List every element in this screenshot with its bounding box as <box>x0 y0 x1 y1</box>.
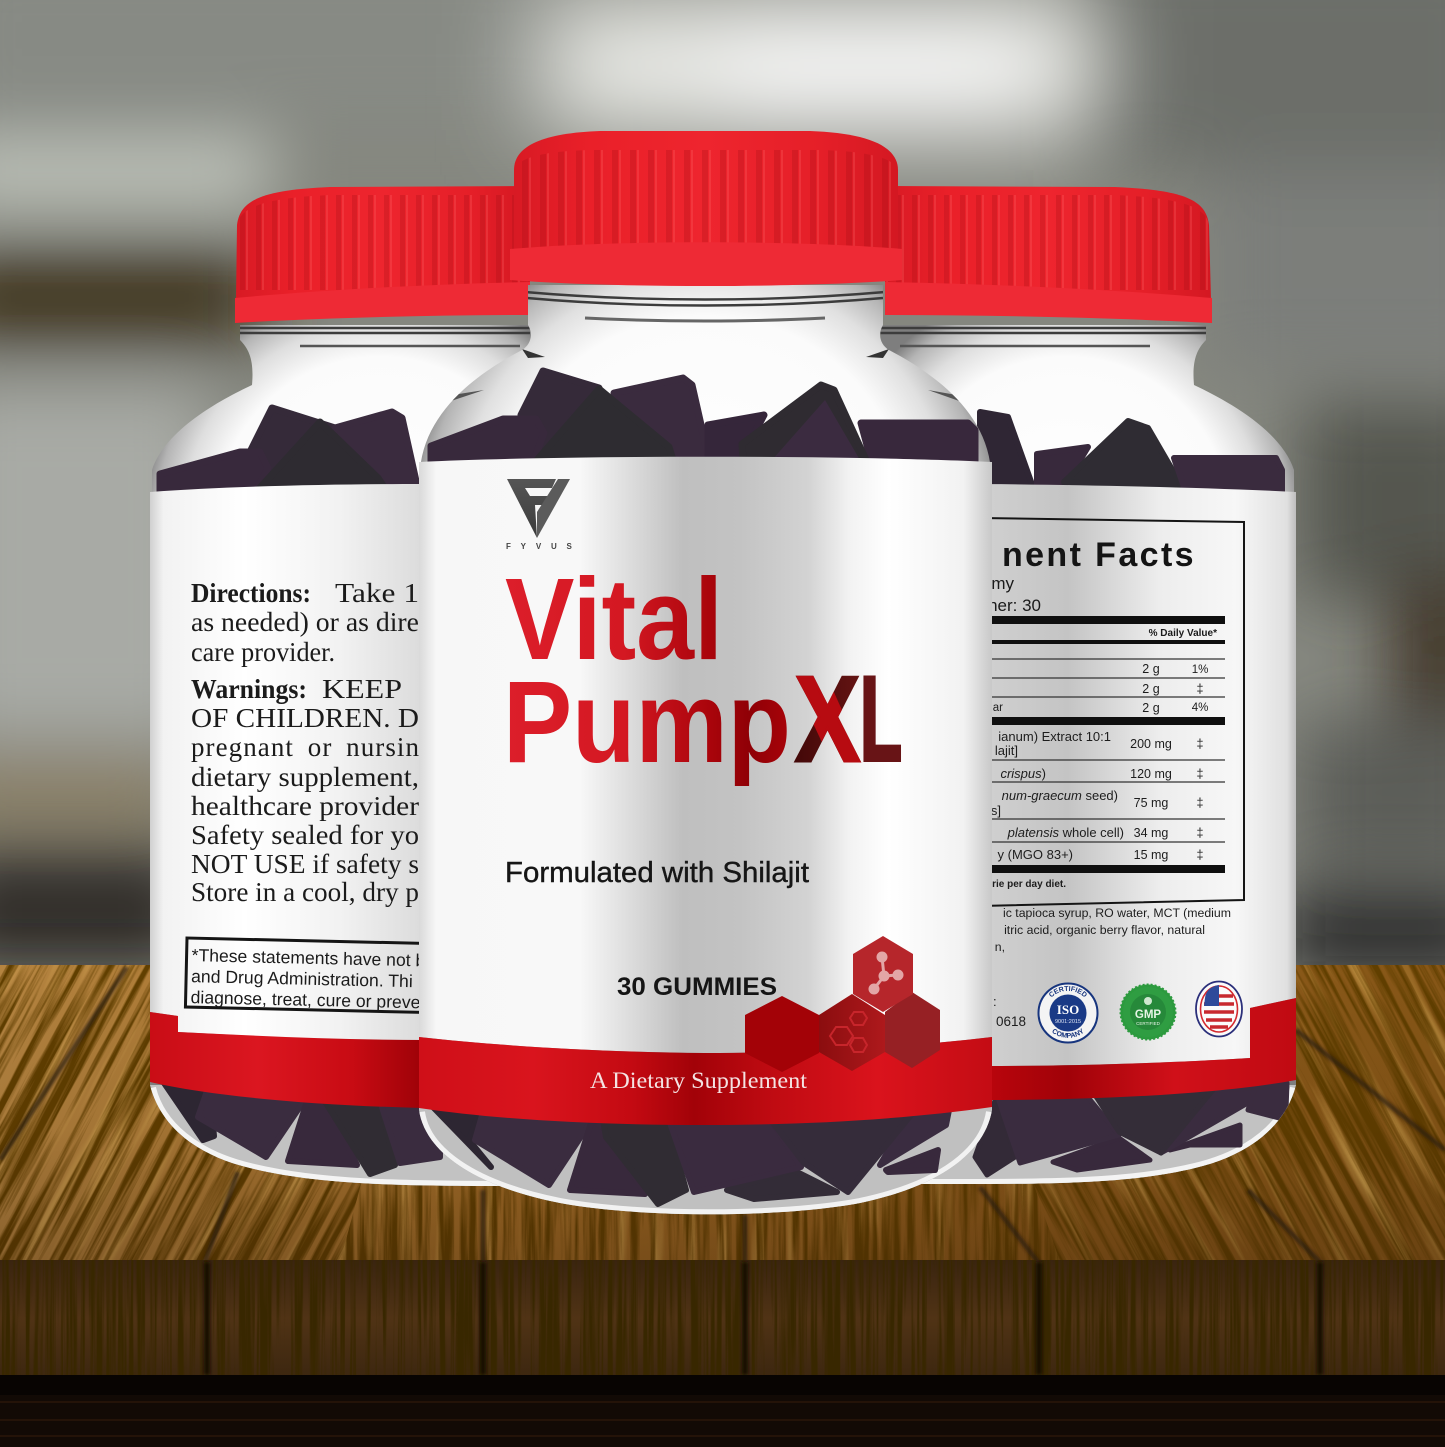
centre red band <box>419 1037 992 1125</box>
logo: FYVUS <box>506 479 582 551</box>
supplement facts panel: 4% <box>1192 702 1208 714</box>
product name: XL <box>794 676 901 762</box>
badge: GMP certified: GMP <box>1135 1009 1161 1021</box>
centre top gummies <box>431 371 975 466</box>
product name: XL: X <box>795 651 860 787</box>
directions and warnings text: healthcare provider <box>191 791 419 821</box>
supplement facts panel: rie per day diet. <box>992 879 1066 890</box>
centre label <box>419 457 992 1053</box>
supplement facts panel: 75 mg <box>1134 796 1168 810</box>
centre jar glass <box>415 280 997 1220</box>
supplement facts panel: lajit] <box>995 743 1018 758</box>
right red band <box>985 998 1296 1100</box>
supplement facts panel: my <box>991 574 1014 593</box>
phone number fragment: : <box>993 994 997 1009</box>
supplement facts panel: ‡ <box>1197 682 1204 696</box>
centre bottle <box>415 131 997 1220</box>
supplement facts panel: ‡ <box>1197 796 1204 810</box>
supplement facts panel <box>980 518 1244 906</box>
badge: GMP certified <box>1120 984 1176 1040</box>
dietary supplement line: A Dietary Supplement <box>590 1068 808 1093</box>
product name: Vital: Vital <box>505 554 723 684</box>
supplement facts panel: 200 mg <box>1130 737 1172 751</box>
supplement facts panel: 120 mg <box>1130 767 1172 781</box>
directions and warnings text <box>191 578 420 907</box>
FDA disclaimer box: diagnose, treat, cure or preve <box>190 987 421 1012</box>
product name: XL: X <box>795 651 860 787</box>
right cap <box>885 186 1212 323</box>
badge: ISO certified: 9001:2015 <box>1055 1019 1081 1025</box>
badge: ISO certified: CERTIFIED <box>1049 986 1087 997</box>
right jar glass <box>880 320 1300 1190</box>
phone number fragment <box>993 994 1026 1029</box>
supplement facts panel: ianum) Extract 10:1 <box>998 729 1111 744</box>
directions and warnings text: dietary supplement, <box>191 762 419 792</box>
supplement facts panel: 2 g <box>1142 662 1160 676</box>
product name: XL: L <box>860 652 902 786</box>
left bottom gummies <box>162 1080 440 1174</box>
directions and warnings text: Safety sealed for yo <box>191 820 419 850</box>
centre red cap <box>510 131 902 286</box>
supplement facts panel: ‡ <box>1197 848 1204 862</box>
supplement facts panel: ‡ <box>1197 737 1204 751</box>
other ingredients text: ic tapioca syrup, RO water, MCT (medium <box>1003 906 1231 920</box>
supplement facts panel: ner: 30 <box>988 596 1041 615</box>
directions and warnings text: care provider. <box>191 637 335 667</box>
supplement facts panel: 2 g <box>1142 682 1160 696</box>
table front edge <box>0 1260 1445 1447</box>
directions and warnings text: Warnings: <box>191 674 307 704</box>
supplement facts panel: ‡ <box>1197 767 1204 781</box>
directions and warnings text: Take 1 <box>335 578 419 608</box>
centre bottom gummies <box>431 1105 949 1204</box>
FDA disclaimer box: and Drug Administration. Thi <box>191 966 413 991</box>
logo: FYVUS: FYVUS <box>506 542 582 551</box>
supplement facts panel: crispus) <box>1000 766 1046 781</box>
other ingredients text <box>995 906 1231 954</box>
supplement facts panel: num-graecum seed) <box>1002 788 1118 803</box>
directions and warnings text: as needed) or as dire <box>191 607 419 637</box>
supplement facts panel: nent Facts <box>1002 536 1196 574</box>
right bottle <box>880 186 1296 1184</box>
badge: ISO certified <box>1038 982 1098 1044</box>
right bottom gummies <box>975 1083 1287 1175</box>
badge: GMP certified: CERTIFIED <box>1136 1021 1161 1026</box>
other ingredients text: itric acid, organic berry flavor, natural <box>1004 923 1205 937</box>
right label <box>985 484 1296 1066</box>
left label <box>150 484 425 1045</box>
badge: ISO certified: COMPANY <box>1052 1028 1083 1038</box>
count: 30 gummies: 30 GUMMIES <box>617 973 777 1001</box>
directions and warnings text: OF CHILDREN. D <box>191 703 419 733</box>
supplement facts panel: 1% <box>1192 664 1208 676</box>
left jar glass <box>140 320 540 1190</box>
other ingredients text: n, <box>995 940 1005 954</box>
directions and warnings text: Store in a cool, dry p <box>191 877 419 907</box>
FDA disclaimer box: *These statements have not b <box>191 945 426 970</box>
supplement facts panel: y (MGO 83+) <box>998 847 1073 862</box>
right top gummies <box>980 412 1282 495</box>
supplement facts panel: 15 mg <box>1134 848 1168 862</box>
supplement facts panel: ar <box>993 702 1003 714</box>
tagline: Formulated with Shilajit <box>505 857 809 889</box>
directions and warnings text: Directions: <box>191 578 311 608</box>
badge: ISO certified: ISO <box>1057 1002 1079 1017</box>
left top gummies <box>160 408 418 495</box>
wooden table top <box>0 965 1445 1265</box>
supplement facts panel: 2 g <box>1142 701 1160 715</box>
directions and warnings text: NOT USE if safety s <box>191 849 419 879</box>
left bottle <box>140 186 540 1190</box>
supplement facts panel: 34 mg <box>1134 826 1168 840</box>
phone number fragment: 0618 <box>996 1014 1026 1029</box>
directions and warnings text: pregnant or nursin <box>191 732 420 762</box>
supplement facts panel: ‡ <box>1197 826 1204 840</box>
hexagon cluster icon <box>745 936 940 1072</box>
directions and warnings text: KEEP <box>322 674 402 704</box>
blurred room background <box>0 0 1445 980</box>
badge: USA flag <box>1196 982 1242 1036</box>
product name: Pump: Pump <box>503 657 791 787</box>
supplement facts panel: platensis whole cell) <box>1007 825 1124 840</box>
left red band <box>150 1012 425 1108</box>
supplement facts panel: % Daily Value* <box>1149 628 1217 639</box>
FDA disclaimer box <box>185 938 447 1013</box>
supplement facts panel: s] <box>991 803 1001 818</box>
left cap <box>235 186 530 323</box>
